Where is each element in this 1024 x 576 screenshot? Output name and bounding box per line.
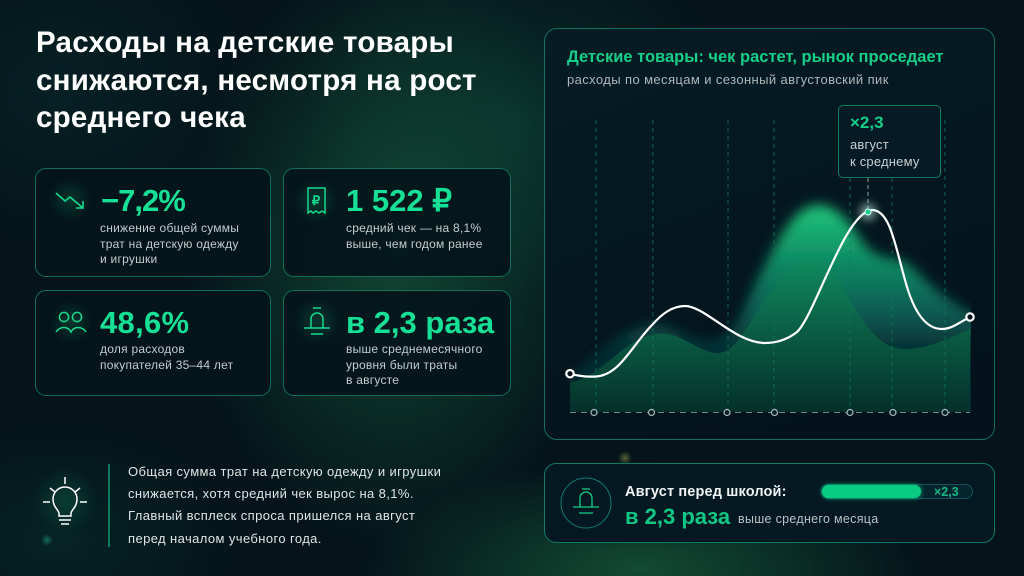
value: 48,6%: 48,6%: [100, 305, 189, 340]
description: покупателей 35–44 лет: [100, 358, 233, 372]
title: [36, 26, 477, 134]
back area series: [560, 205, 985, 425]
icon: receipt with ruble: [300, 184, 332, 218]
summary value: в 2,3 раза: [625, 504, 730, 529]
panel: chart: [544, 28, 995, 440]
callout label: [850, 137, 920, 168]
description: и игрушки: [100, 252, 157, 266]
description: выше, чем годом ранее: [346, 236, 483, 250]
title: снижаются, несмотря на рост: [36, 64, 477, 96]
description: [346, 342, 483, 387]
summary text: перед началом учебного года.: [128, 531, 322, 546]
icon: light bulb: [42, 476, 88, 525]
axis markers: [591, 410, 948, 416]
spark: lower left: [41, 534, 53, 546]
description: [100, 342, 233, 372]
summary description: выше среднего месяца: [738, 512, 878, 526]
description: в августе: [346, 373, 399, 387]
summary text: Общая сумма трат на детскую одежду и игрушки: [128, 464, 441, 479]
icon: school bell: [300, 304, 334, 338]
title: Расходы на детские товары: [36, 26, 454, 59]
bar label: ×2,3: [934, 485, 959, 499]
panel: August multiplier card: [283, 290, 511, 396]
peak marker: [859, 203, 877, 221]
description: [100, 221, 239, 266]
panel: buyers share card: [35, 290, 271, 396]
icon: falling trend: [54, 184, 86, 216]
area and line chart: [565, 120, 975, 416]
peak callout: [838, 105, 941, 178]
summary text: [128, 464, 441, 546]
axis: [570, 412, 970, 414]
front area series: [570, 262, 970, 412]
start point: [566, 370, 574, 377]
panel: total spending card: [35, 168, 271, 277]
icon: people: [54, 306, 88, 338]
description: трат на детскую одежду: [100, 236, 239, 250]
peak connector: [867, 178, 869, 210]
description: снижение общей суммы: [100, 221, 239, 235]
panel: average check card: [283, 168, 511, 277]
callout value: ×2,3: [850, 113, 884, 132]
description: уровня были траты: [346, 358, 457, 372]
description: доля расходов: [100, 342, 185, 356]
summary text: Главный всплеск спроса пришелся на август: [128, 508, 415, 523]
chart heading: Детские товары: чек растет, рынок проседает: [567, 48, 944, 66]
value: в 2,3 раза: в 2,3 раза: [346, 305, 494, 340]
progress bar: [821, 484, 973, 499]
end point: [966, 313, 974, 321]
value: 1 522 ₽: 1 522 ₽: [346, 183, 452, 218]
callout label: к среднему: [850, 154, 920, 168]
icon: receipt with ruble: ₽: [312, 193, 321, 208]
grid lines: [596, 120, 945, 412]
callout label: август: [850, 137, 889, 152]
description: средний чек — на 8,1%: [346, 221, 481, 235]
bar fill: [822, 485, 921, 498]
spending line: [570, 210, 970, 377]
spark: above summary panel: [618, 451, 632, 465]
panel: August summary: [544, 463, 995, 543]
value: -7,2%: −7,2%: [101, 183, 185, 218]
icon: bell in circle: [560, 478, 612, 528]
chart subtitle: расходы по месяцам и сезонный августовский пик: [567, 72, 889, 87]
description: выше среднемесячного: [346, 342, 483, 356]
description: [346, 221, 483, 250]
summary text: снижается, хотя средний чек вырос на 8,1%.: [128, 486, 414, 501]
summary heading: Август перед школой:: [625, 484, 787, 500]
title: среднего чека: [36, 101, 246, 134]
divider: [108, 464, 110, 547]
